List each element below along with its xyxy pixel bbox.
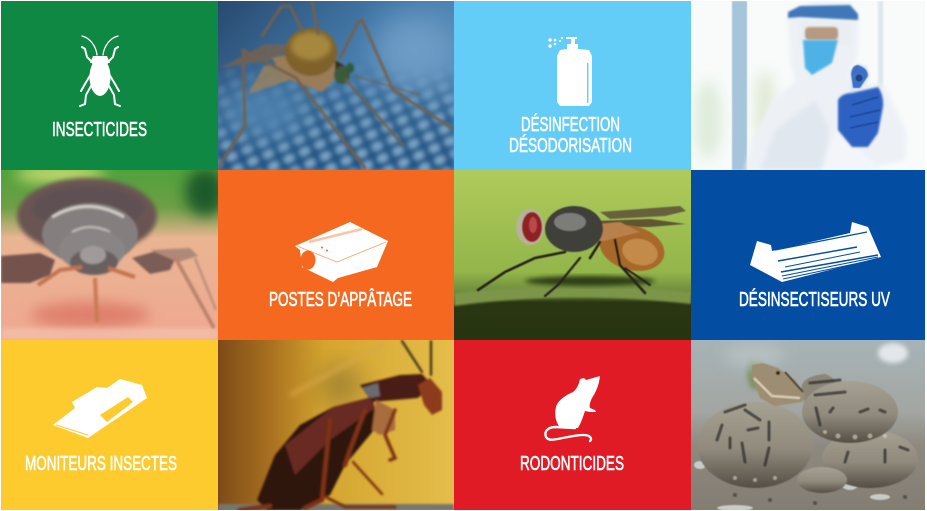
panel: insecticides <box>1 1 218 170</box>
photo: bed bug <box>1 165 225 340</box>
panel: postes d'appâtage <box>218 170 454 340</box>
photo: house fly on leaf <box>454 170 691 340</box>
label: désinfection désodorisation: DÉSODORISATION <box>509 134 632 157</box>
panel: désinfection désodorisation <box>454 1 691 170</box>
icon: spray bottle <box>548 37 592 106</box>
icon: beetle <box>80 36 120 106</box>
label: moniteurs insectes: MONITEURS INSECTES <box>25 453 177 475</box>
label: insecticides: INSECTICIDES <box>52 119 147 141</box>
label: désinfection désodorisation: DÉSINFECTION <box>521 113 620 136</box>
icon: rat <box>545 376 600 441</box>
panel: désinsectiseurs uv <box>691 170 925 340</box>
photo: cockroach <box>218 340 454 511</box>
panel: moniteurs insectes <box>1 340 218 510</box>
photo: technician in protective suit with thermometer <box>691 1 925 170</box>
label: rodonticides: RODONTICIDES <box>520 453 624 475</box>
icon: bait station <box>295 222 388 282</box>
photo: coiled viper on gravel <box>691 340 925 511</box>
panel: rodonticides <box>454 340 691 510</box>
icon: insect monitor <box>53 379 147 438</box>
label: désinfection désodorisation <box>509 113 632 157</box>
icon: uv insect trap <box>750 222 881 282</box>
photo: mosquito on denim <box>217 1 455 170</box>
label: postes d'appâtage: POSTES D’APPÂTAGE <box>269 288 412 311</box>
